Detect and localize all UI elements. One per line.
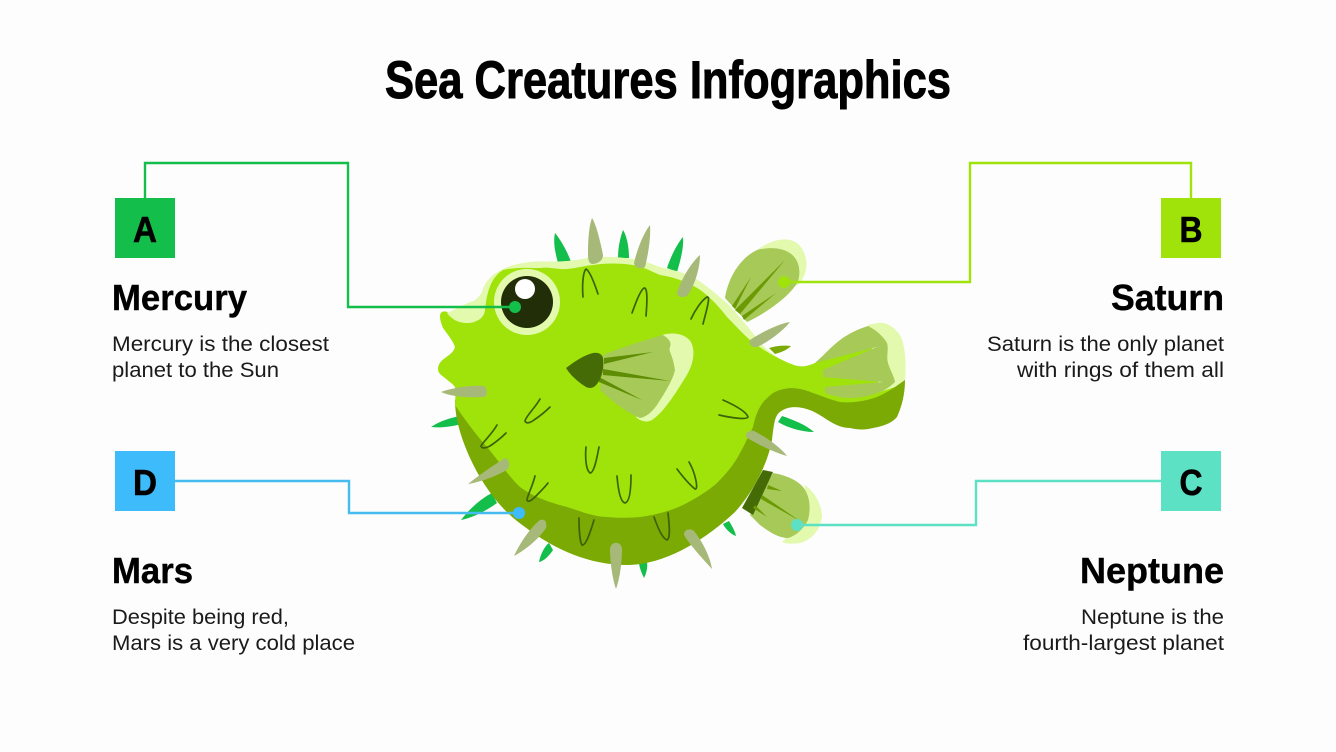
small dark spike near tail (769, 346, 791, 354)
title: Sea Creatures Infographics (385, 51, 951, 110)
connector D (175, 481, 525, 519)
eye (494, 269, 560, 335)
top fin (725, 239, 806, 322)
text Mars: Despite being red, (112, 606, 289, 629)
grey-green spikes (441, 218, 790, 589)
heading Mercury: Mercury (112, 277, 247, 318)
text Mercury: Mercury is the closest (112, 333, 329, 356)
bright green upper body (438, 264, 895, 518)
badge D: D (133, 462, 157, 503)
connector B (778, 163, 1191, 288)
panel: Saturn (987, 198, 1224, 382)
badge B (1161, 198, 1221, 258)
side fin (566, 333, 693, 421)
badge A (115, 198, 175, 258)
text Mars: Mars is a very cold place (112, 632, 355, 655)
heading Neptune: Neptune (1080, 550, 1224, 591)
text Mercury: planet to the Sun (112, 359, 279, 382)
heading Saturn: Saturn (1111, 277, 1224, 318)
tail fin (815, 323, 906, 398)
illustration: pufferfish (431, 218, 906, 589)
green spikes behind body (431, 230, 814, 578)
text Saturn: Saturn is the only planet (987, 333, 1224, 356)
text Neptune: Neptune is the (1081, 606, 1224, 629)
panel: Mercury (112, 198, 329, 382)
skin marks (481, 269, 748, 545)
text Neptune (1023, 606, 1224, 655)
badge C: C (1180, 462, 1202, 503)
dark green lower body (455, 370, 905, 565)
text Neptune: fourth-largest planet (1023, 632, 1224, 655)
panel: Neptune (1023, 451, 1224, 655)
heading Mars: Mars (112, 550, 193, 591)
text Saturn (987, 333, 1224, 382)
text Mercury (112, 333, 329, 382)
connector A (145, 163, 521, 313)
lip highlight (447, 298, 484, 323)
panel: Mars (112, 451, 355, 655)
badge A: A (133, 209, 157, 250)
badge C (1161, 451, 1221, 511)
bottom fin (742, 470, 822, 544)
text Saturn: with rings of them all (1016, 359, 1224, 382)
text Mars (112, 606, 355, 655)
badge B: B (1180, 209, 1202, 250)
connector C (791, 481, 1161, 531)
light highlight along the back (447, 257, 790, 385)
badge D (115, 451, 175, 511)
